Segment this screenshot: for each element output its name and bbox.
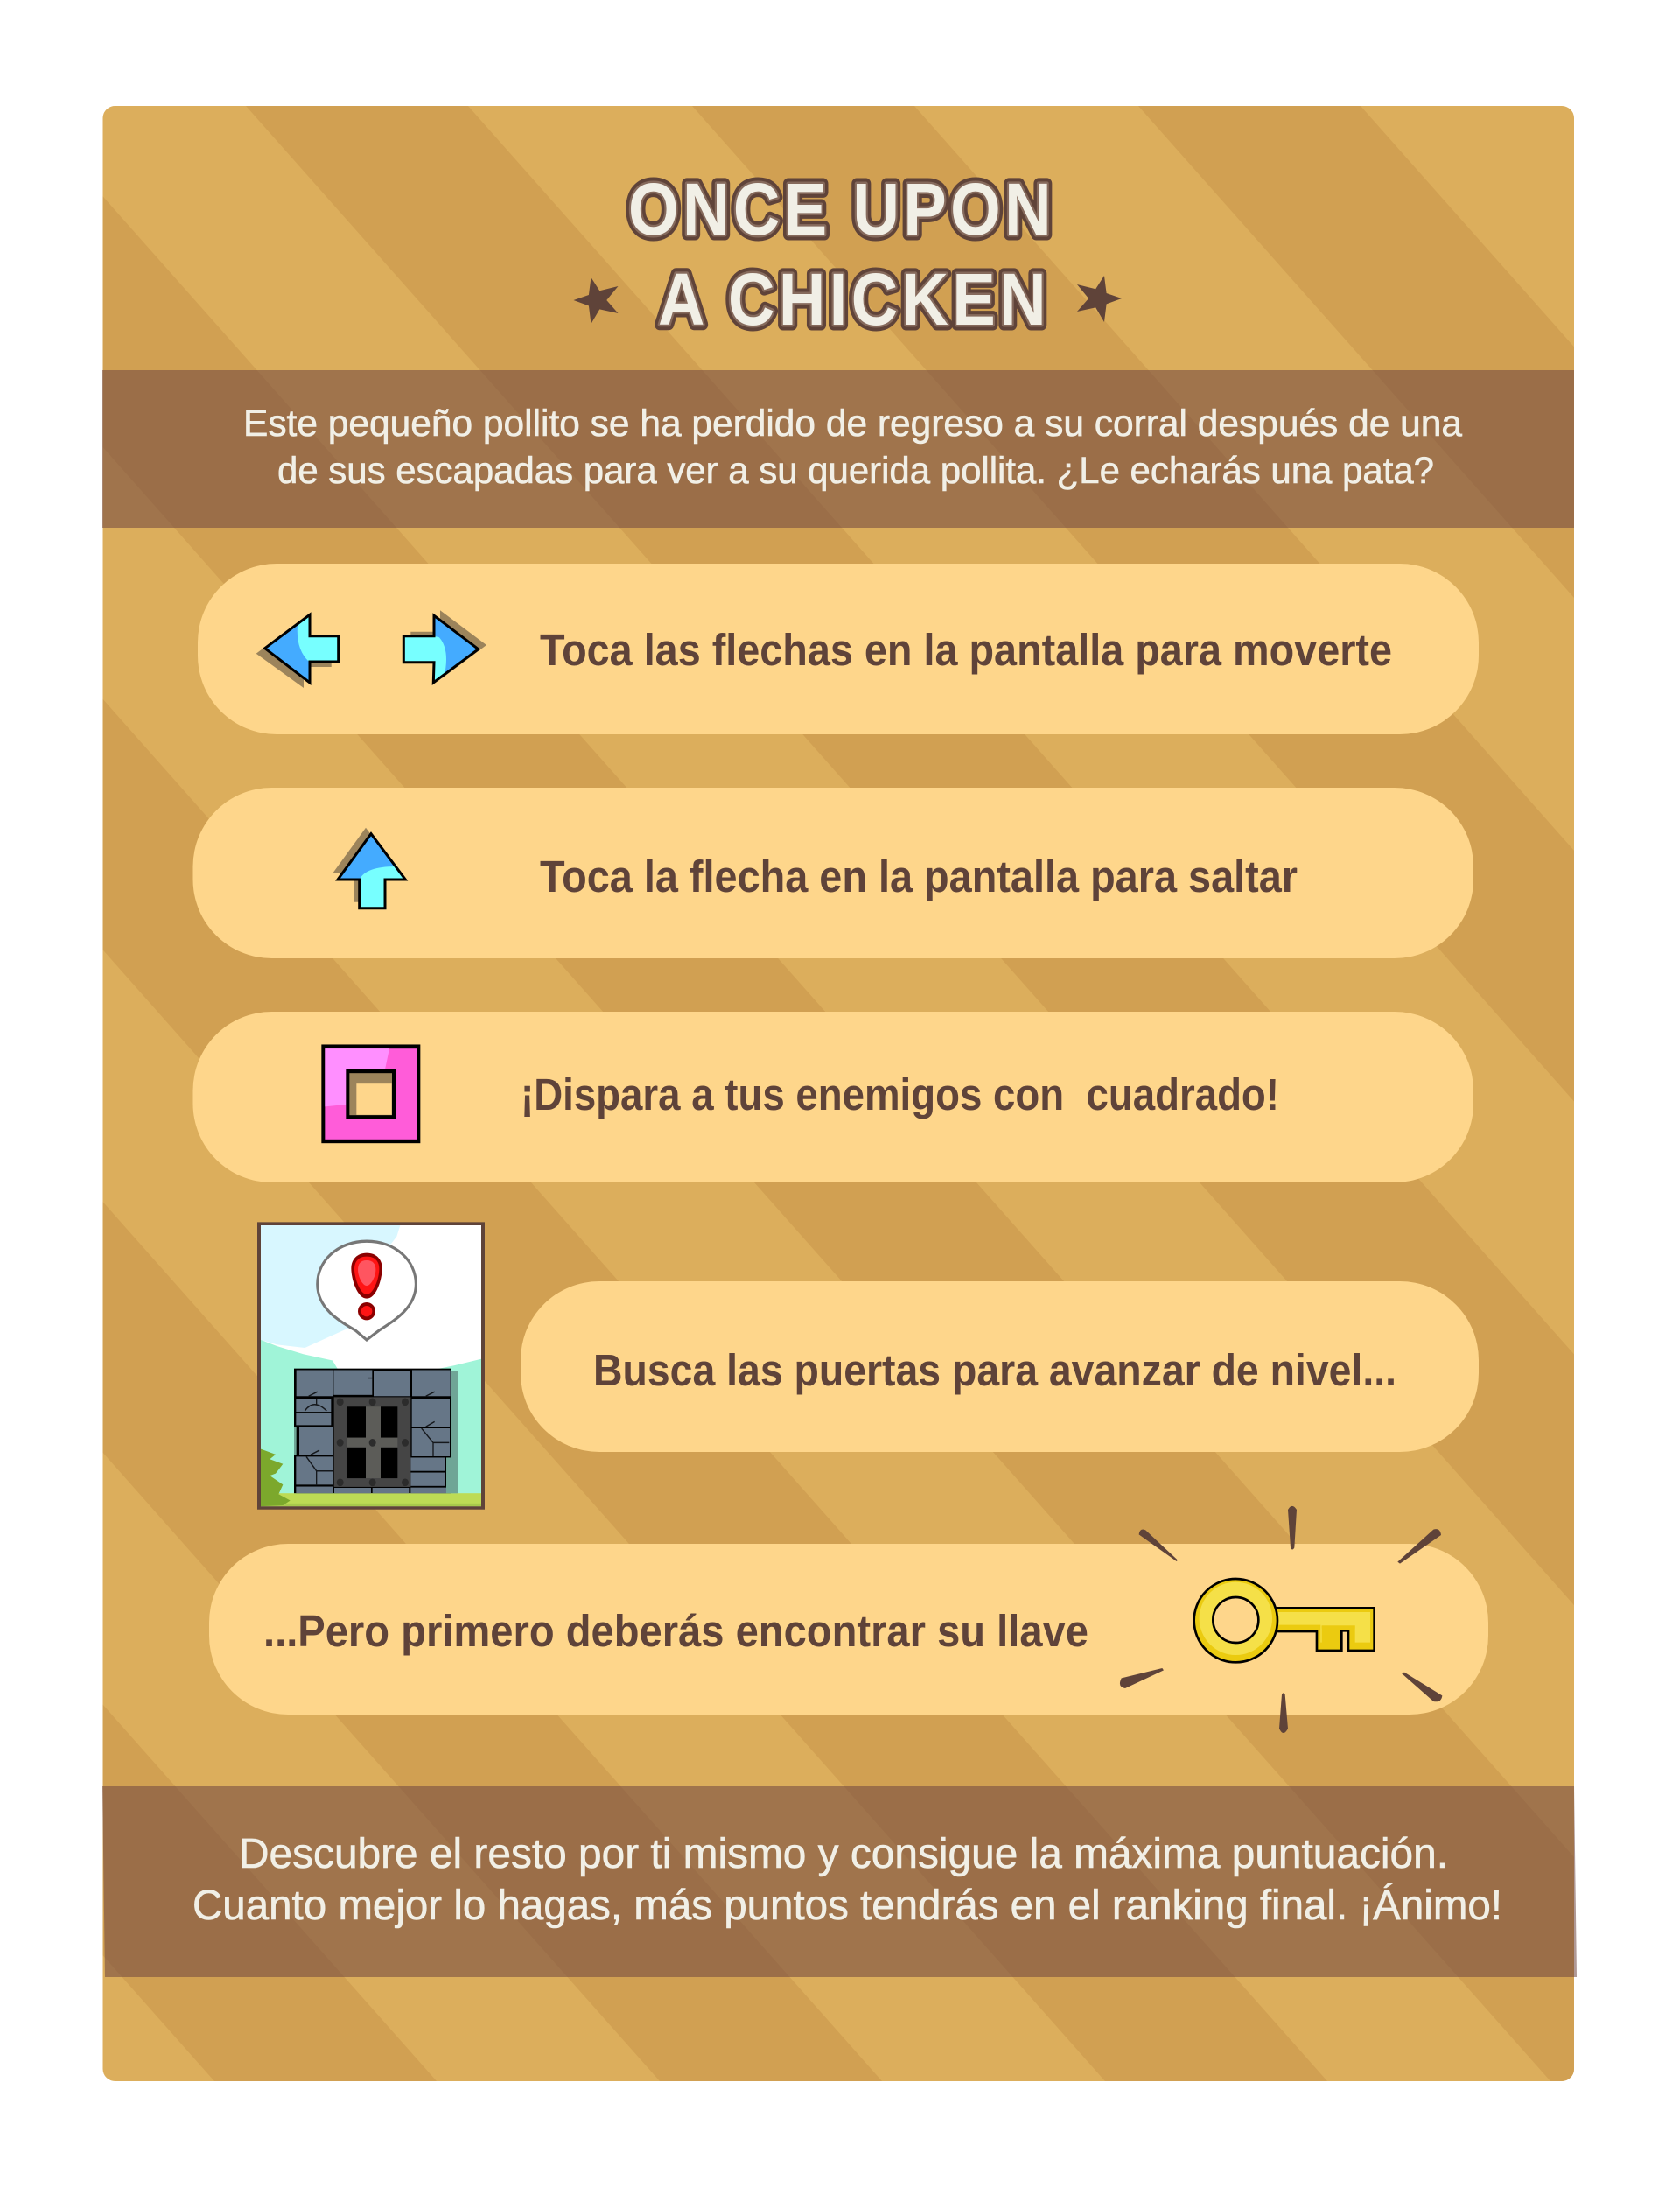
closing text — [192, 1831, 1502, 1929]
panel: instruction key — [209, 1506, 1488, 1733]
panel: instruction jump — [192, 788, 1474, 958]
intro text: Este pequeño pollito se ha perdido de regreso a su corral después de una — [243, 403, 1462, 445]
icon: key with rays — [1120, 1506, 1442, 1733]
panel: closing banner — [102, 1786, 1577, 1977]
key — [1194, 1579, 1375, 1662]
instruction text: Busca las puertas para avanzar de nivel... — [593, 1345, 1396, 1395]
title: ONCE UPON — [628, 168, 1055, 250]
panel: instruction move — [198, 564, 1479, 734]
rays — [1120, 1506, 1442, 1733]
icon: pink square — [321, 1044, 420, 1143]
panel: instruction door — [521, 1281, 1479, 1452]
icon: right arrow — [403, 610, 486, 683]
speech bubble with exclamation mark — [318, 1241, 416, 1340]
instruction text: Toca las flechas en la pantalla para moverte — [540, 625, 1392, 675]
icon: door scene — [257, 1222, 485, 1510]
intro text: de sus escapadas para ver a su querida pollita. ¿Le echarás una pata? — [277, 450, 1434, 492]
title: A CHICKEN — [658, 258, 1050, 340]
panel: instruction shoot — [192, 1012, 1474, 1182]
icon: up arrow — [332, 828, 405, 908]
panel: striped card background — [103, 106, 1574, 2081]
instruction text: ¡Dispara a tus enemigos con cuadrado! — [521, 1069, 1279, 1119]
closing text: Cuanto mejor lo hagas, más puntos tendrás en el ranking final. ¡Ánimo! — [192, 1883, 1502, 1929]
instruction text: Toca la flecha en la pantalla para saltar — [540, 852, 1298, 901]
icon: left arrow — [256, 614, 339, 688]
title: A CHICKEN — [658, 258, 1050, 340]
door wall — [294, 1369, 458, 1493]
panel: intro banner — [102, 370, 1574, 528]
intro text — [243, 403, 1462, 492]
title: ONCE UPON — [628, 168, 1055, 250]
icon: right star — [1077, 276, 1122, 322]
title — [628, 168, 1055, 340]
closing text: Descubre el resto por ti mismo y consigue la máxima puntuación. — [239, 1831, 1448, 1877]
instruction text: ...Pero primero deberás encontrar su llave — [263, 1606, 1088, 1656]
icon: left star — [574, 277, 618, 324]
door — [334, 1397, 410, 1487]
